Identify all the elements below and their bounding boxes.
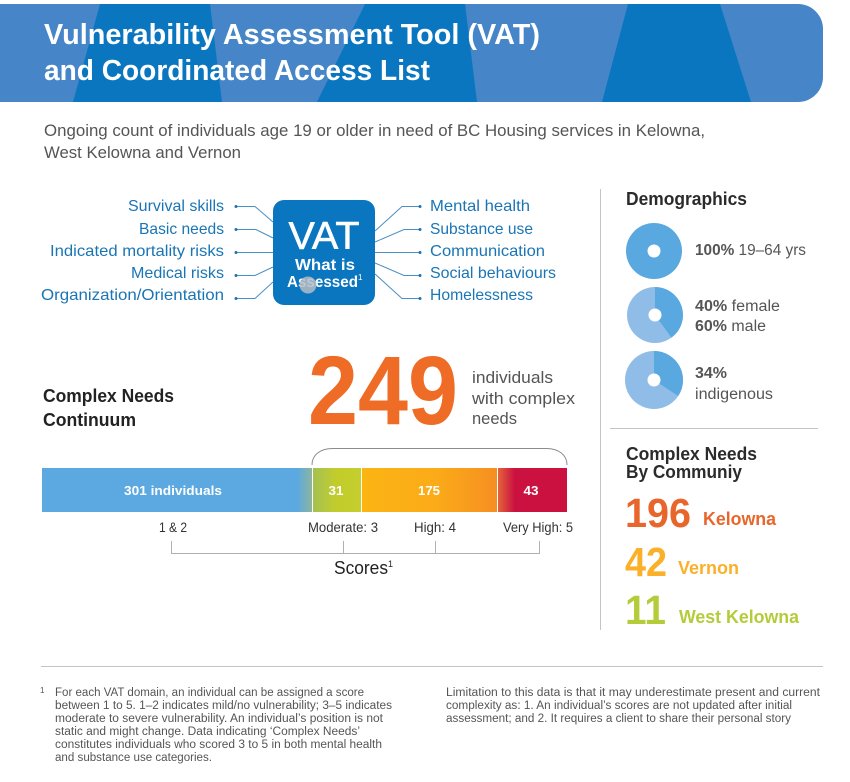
label: gender: 60% male bbox=[695, 318, 766, 335]
Kelowna count bbox=[625, 490, 777, 536]
VAT box: Assessed bbox=[287, 274, 358, 291]
community heading bbox=[626, 444, 757, 482]
continuum bar: 31 bbox=[328, 483, 344, 498]
249 caption bbox=[471, 369, 576, 428]
title: and Coordinated Access List bbox=[44, 55, 430, 87]
scores label: Scores bbox=[334, 557, 388, 578]
donut: indigenous bbox=[625, 351, 683, 409]
footnote 1: For each VAT domain, an individual can be assigned a score bbox=[55, 687, 364, 699]
VAT box: What is bbox=[295, 257, 355, 274]
continuum bar: 175 bbox=[418, 483, 440, 498]
Kelowna count: 196 bbox=[625, 490, 691, 536]
footnote 1: 1 bbox=[40, 686, 45, 695]
left assessment domains: Medical risks bbox=[131, 265, 224, 282]
continuum bar: 301 individuals bbox=[124, 483, 222, 498]
left assessment domains: Organization/Orientation bbox=[41, 287, 224, 304]
donut: female and male bbox=[627, 287, 683, 343]
right assessment domains: Mental health bbox=[430, 198, 530, 215]
column divider bbox=[600, 189, 602, 630]
title: Vulnerability Assessment Tool (VAT) bbox=[44, 19, 540, 51]
footnote 1: static and might change. Data indicating ‘Complex Needs’ bbox=[55, 726, 360, 738]
continuum bar: 43 bbox=[524, 483, 538, 498]
right assessment domains: Communication bbox=[430, 243, 545, 260]
footer divider bbox=[41, 666, 823, 668]
score labels: Very High: 5 bbox=[503, 519, 573, 535]
footnote 1: constitutes individuals who scored 3 to 5 in both mental health bbox=[55, 739, 382, 751]
label: indigenous: indigenous bbox=[695, 386, 773, 403]
panel: demographics bbox=[625, 189, 806, 409]
continuum heading: Complex Needs bbox=[43, 386, 174, 406]
continuum bar bbox=[42, 468, 567, 512]
Vernon count bbox=[625, 539, 739, 585]
Vernon count: 42 bbox=[625, 539, 667, 585]
West Kelowna count bbox=[625, 587, 800, 633]
right assessment domains: Substance use bbox=[430, 221, 533, 238]
limitation note: Limitation to this data is that it may underestimate present and current bbox=[446, 687, 821, 699]
score labels bbox=[159, 519, 573, 535]
right panel divider bbox=[610, 428, 818, 430]
label: indigenous: 34% bbox=[695, 365, 727, 382]
249 caption: with complex bbox=[471, 390, 576, 408]
VAT diagram bbox=[41, 198, 556, 305]
score labels: High: 4 bbox=[414, 519, 456, 535]
249 caption: individuals bbox=[472, 369, 553, 387]
footnote 1: and substance use categories. bbox=[55, 752, 212, 764]
big number 249: 249 bbox=[308, 336, 458, 445]
right assessment domains bbox=[430, 198, 556, 304]
panel: complex needs by community bbox=[625, 444, 800, 633]
left assessment domains: Basic needs bbox=[139, 221, 224, 238]
limitation note bbox=[446, 687, 821, 725]
footnote 1: between 1 to 5. 1–2 indicates mild/no vulnerability; 3–5 indicates bbox=[55, 700, 392, 712]
footnote 1: moderate to severe vulnerability. An individual’s position is not bbox=[55, 713, 384, 725]
left assessment domains bbox=[41, 198, 224, 304]
subtitle: West Kelowna and Vernon bbox=[44, 143, 241, 162]
left assessment domains: Indicated mortality risks bbox=[50, 243, 224, 260]
Vernon count: Vernon bbox=[678, 558, 739, 578]
score labels: Moderate: 3 bbox=[308, 519, 378, 535]
demographics heading: Demographics bbox=[626, 189, 747, 209]
community heading: By Communiy bbox=[626, 462, 742, 482]
right assessment domains: Homelessness bbox=[430, 287, 533, 304]
label: age: 100% 19–64 yrs bbox=[695, 242, 806, 259]
limitation note: complexity as: 1. An individual’s scores are not updated after initial bbox=[446, 700, 792, 712]
249 caption: needs bbox=[472, 410, 517, 428]
label: gender bbox=[695, 298, 780, 335]
community heading: Complex Needs bbox=[626, 444, 757, 464]
label: gender: 40% female bbox=[695, 298, 780, 315]
connector lines bbox=[234, 205, 422, 300]
VAT box: VAT bbox=[288, 215, 360, 258]
bracket over complex needs bbox=[312, 448, 567, 465]
right assessment domains: Social behaviours bbox=[430, 265, 556, 282]
West Kelowna count: 11 bbox=[625, 587, 666, 633]
VAT box: 1 bbox=[358, 273, 363, 282]
VAT box bbox=[273, 200, 375, 305]
title bbox=[44, 19, 540, 87]
score labels: 1 & 2 bbox=[159, 519, 187, 535]
donut: 100% age 19-64 bbox=[626, 223, 682, 279]
scores label: 1 bbox=[388, 559, 393, 569]
West Kelowna count: West Kelowna bbox=[679, 607, 800, 627]
left assessment domains: Survival skills bbox=[128, 198, 224, 215]
label: indigenous bbox=[695, 365, 773, 403]
limitation note: assessment; and 2. It requires a client to share their personal story bbox=[446, 713, 791, 725]
continuum heading: Continuum bbox=[43, 410, 136, 430]
continuum heading bbox=[43, 386, 174, 430]
subtitle: Ongoing count of individuals age 19 or older in need of BC Housing services in Kelowna, bbox=[44, 121, 705, 140]
footnote 1 bbox=[40, 686, 392, 764]
scores bracket bbox=[172, 541, 540, 554]
Kelowna count: Kelowna bbox=[703, 509, 777, 529]
subtitle bbox=[44, 121, 705, 162]
header banner bbox=[0, 4, 823, 102]
